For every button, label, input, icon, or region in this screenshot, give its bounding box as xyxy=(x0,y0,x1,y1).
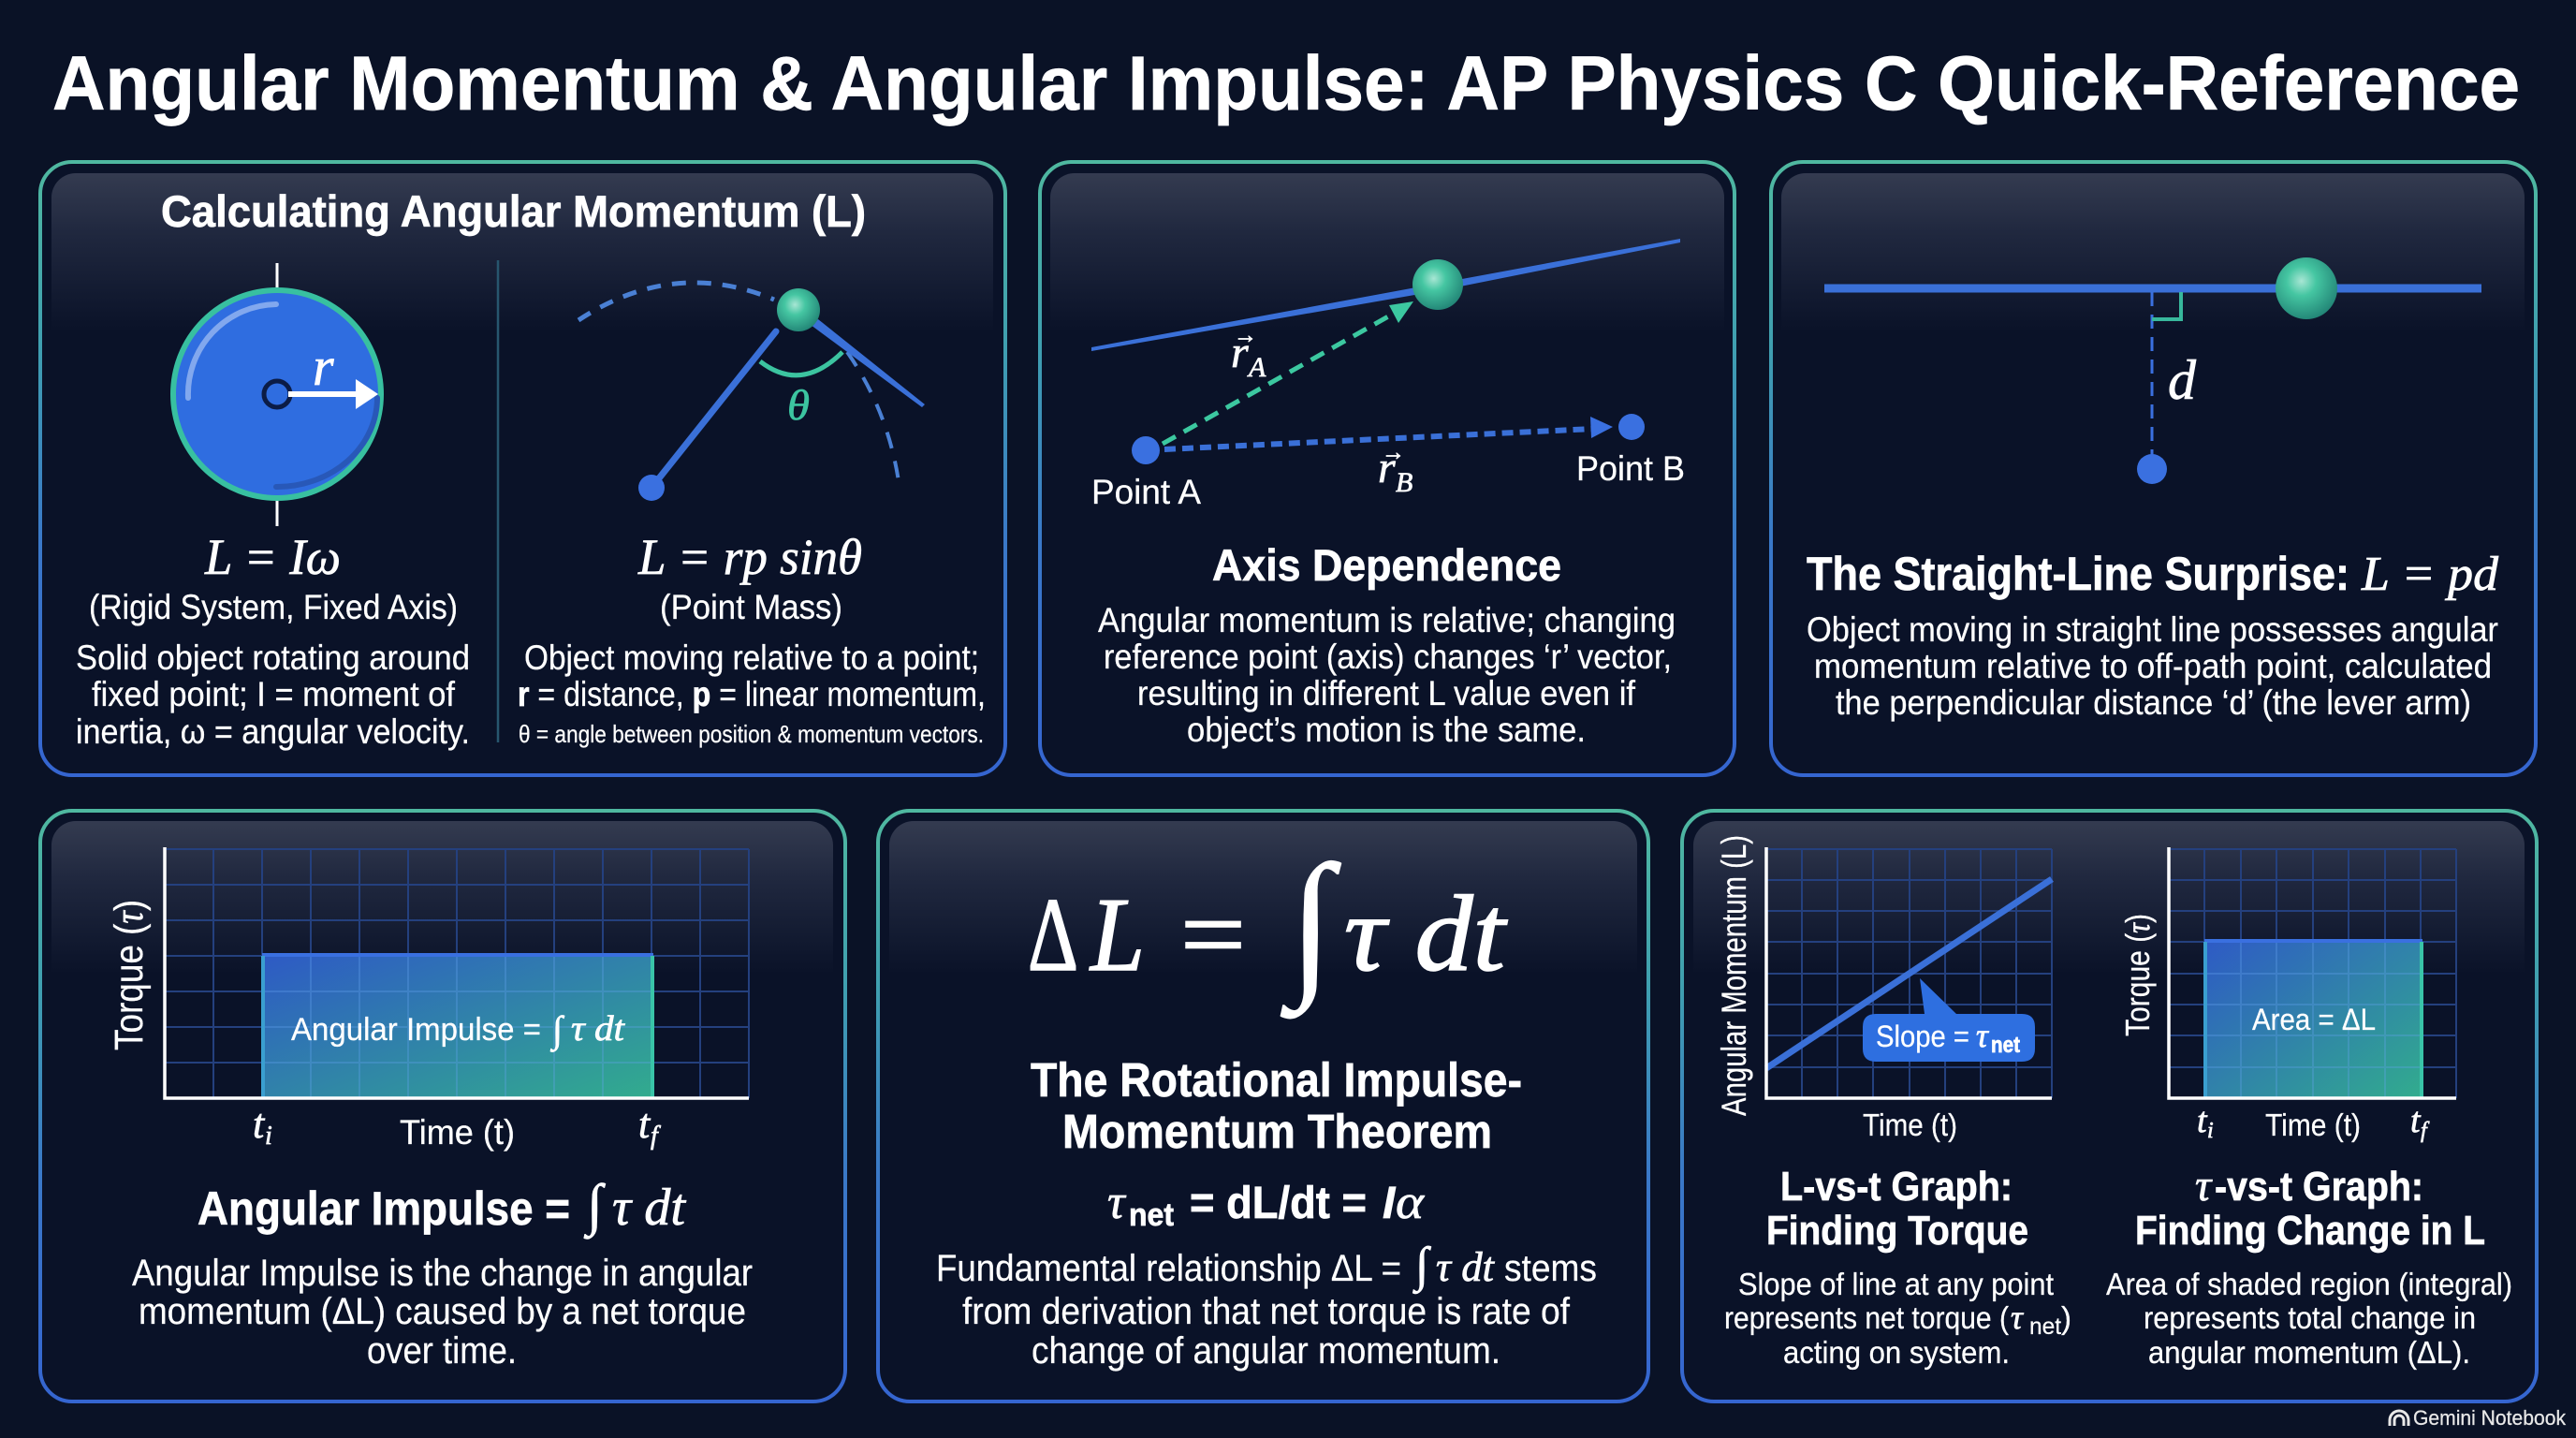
panel: axis dependence xyxy=(1040,162,1734,775)
chart: torque vs time area: Angular Impulse = xyxy=(291,1012,541,1048)
chart: L vs t: Time (t) xyxy=(1863,1108,1957,1142)
heading: straight-line surprise: The Straight-Line Surprise: xyxy=(1807,548,2349,600)
diagram: two reference points xyxy=(1091,239,1685,511)
text: theorem description xyxy=(936,1239,1597,1372)
chart: torque vs t: Area = ΔL xyxy=(2252,1003,2376,1036)
heading: rotational impulse-momentum theorem: Momentum Theorem xyxy=(1062,1105,1492,1158)
chart: L vs t: Angular Momentum (L) xyxy=(1715,835,1753,1116)
callout: slope equals net torque: net xyxy=(1991,1033,2020,1058)
label: rigid system: (Rigid System, Fixed Axis) xyxy=(89,588,458,626)
chart: torque vs t xyxy=(2118,847,2456,1143)
chart: torque vs time area: t xyxy=(638,1101,651,1147)
callout: slope equals net torque xyxy=(1863,978,2035,1062)
formula: L = I omega: L = Iω xyxy=(204,529,341,585)
text: axis dependence description: reference point (axis) changes ‘r’ vector, xyxy=(1104,638,1672,676)
text: torque-vs-t description: represents total change in xyxy=(2144,1300,2476,1335)
icon: rotating disc with radius xyxy=(173,263,381,526)
text: torque-vs-t description: angular momentum (ΔL). xyxy=(2148,1335,2470,1370)
text: axis dependence description: object’s motion is the same. xyxy=(1187,711,1586,749)
text: theorem description: Fundamental relationship ΔL = xyxy=(936,1248,1401,1289)
text: L-vs-t description: τ xyxy=(2011,1299,2024,1336)
heading: rotational impulse-momentum theorem xyxy=(1031,1053,1522,1158)
formula: delta L = integral tau dt: = xyxy=(1180,877,1246,993)
heading: L-vs-t graph xyxy=(1766,1164,2028,1254)
text: torque-vs-t description: Area of shaded region (integral) xyxy=(2106,1267,2512,1301)
chart: L vs t xyxy=(1715,835,2052,1142)
chart: torque vs t: Torque (τ) xyxy=(2118,914,2157,1036)
formula: net torque: τ xyxy=(1107,1176,1127,1229)
callout: slope equals net torque: Slope = xyxy=(1876,1020,1969,1053)
label: point mass: (Point Mass) xyxy=(660,588,842,626)
divider xyxy=(497,260,499,742)
text: angular impulse description: over time. xyxy=(367,1330,517,1372)
text: straight-line description: momentum relative to off-path point, calculated xyxy=(1814,647,2492,685)
text: point mass description: r = distance, p = linear momentum, xyxy=(518,675,986,713)
diagram: lever arm xyxy=(1824,257,2481,484)
callout: slope equals net torque: τ xyxy=(1976,1017,1989,1054)
text: L-vs-t description xyxy=(1724,1267,2071,1370)
text: angular impulse description xyxy=(132,1253,753,1372)
text: L-vs-t description: net xyxy=(2029,1313,2061,1340)
text: rigid system description xyxy=(76,638,470,751)
heading: torque-vs-t graph: Finding Change in L xyxy=(2135,1208,2485,1254)
text: angular impulse description: momentum (ΔL) caused by a net torque xyxy=(139,1291,746,1332)
title: Angular Momentum & Angular Impulse: AP Physics C Quick-Reference xyxy=(52,41,2520,126)
formula: L = r p sin theta: L = rp sinθ xyxy=(637,529,862,585)
watermark: Gemini Notebook: Gemini Notebook xyxy=(2413,1406,2567,1430)
text: axis dependence description: Angular momentum is relative; changing xyxy=(1098,601,1676,639)
text: L-vs-t description: ) xyxy=(2061,1300,2071,1335)
heading: angular impulse formula: Angular Impulse = xyxy=(198,1182,570,1235)
heading: L-vs-t graph: Finding Torque xyxy=(1766,1208,2028,1254)
diagram: two reference points: → xyxy=(1382,439,1405,465)
panel: graph analysis xyxy=(1682,811,2537,1401)
heading: torque-vs-t graph: -vs-t Graph: xyxy=(2215,1164,2423,1210)
heading: torque-vs-t graph: τ xyxy=(2195,1161,2213,1211)
text: point mass description: θ = angle between position & momentum vectors. xyxy=(519,720,984,748)
chart: torque vs t: t xyxy=(2410,1101,2422,1140)
formula: delta L = integral tau dt: τ dt xyxy=(1344,874,1508,994)
chart: torque vs t: f xyxy=(2421,1119,2430,1143)
text: theorem description: from derivation that net torque is rate of xyxy=(962,1291,1571,1332)
heading: angular impulse formula: τ dt xyxy=(612,1179,686,1237)
chart: torque vs t: i xyxy=(2207,1119,2214,1143)
heading: straight-line surprise: L = pd xyxy=(2361,548,2499,601)
diagram: two reference points: r xyxy=(1231,328,1249,377)
text: axis dependence description xyxy=(1098,601,1676,749)
formula: net torque: net xyxy=(1129,1197,1174,1233)
text: theorem description: change of angular momentum. xyxy=(1032,1330,1500,1372)
icon: rotating disc with radius: r xyxy=(313,336,334,397)
chart: torque vs time area: i xyxy=(265,1122,272,1151)
panel: rotational impulse-momentum theorem xyxy=(878,811,1648,1401)
chart: torque vs time area: τ dt xyxy=(571,1009,626,1049)
text: axis dependence description: resulting in different L value even if xyxy=(1137,674,1636,712)
chart: torque vs time area: f xyxy=(651,1122,661,1151)
heading: rotational impulse-momentum theorem: The Rotational Impulse- xyxy=(1031,1053,1522,1107)
text: straight-line description xyxy=(1807,610,2498,722)
formula: net torque: I xyxy=(1383,1179,1397,1228)
diagram: two reference points: Point A xyxy=(1091,473,1201,511)
diagram: two reference points: A xyxy=(1247,352,1266,383)
text: rigid system description: Solid object rotating around xyxy=(76,638,470,677)
panel: angular impulse xyxy=(40,811,845,1401)
formula: delta L = integral tau dt: L xyxy=(1089,877,1145,993)
diagram: two reference points: → xyxy=(1234,322,1257,348)
formula: delta L = integral tau dt: Δ xyxy=(1028,877,1078,993)
diagram: point mass with position and momentum xyxy=(578,283,925,501)
text: L-vs-t description: acting on system. xyxy=(1783,1335,2010,1370)
chart: torque vs time area: Torque (τ) xyxy=(107,900,152,1050)
formula: net torque: = dL/dt = xyxy=(1190,1179,1367,1228)
text: rigid system description: inertia, ω = angular velocity. xyxy=(76,712,470,751)
text: torque-vs-t description xyxy=(2106,1267,2512,1370)
chart: torque vs t: t xyxy=(2197,1101,2208,1140)
heading: angular impulse formula xyxy=(198,1174,686,1240)
chart: torque vs time area: Time (t) xyxy=(400,1113,515,1152)
text: angular impulse description: Angular Impulse is the change in angular xyxy=(132,1253,753,1294)
formula: delta L = integral tau dt xyxy=(1028,833,1508,1020)
heading: angular impulse formula: ∫ xyxy=(583,1174,606,1240)
text: straight-line description: Object moving in straight line possesses angular xyxy=(1807,610,2498,649)
text: point mass description xyxy=(518,638,986,748)
panel: calculating angular momentum xyxy=(40,162,1005,775)
heading: calculating angular momentum: Calculating Angular Momentum (L) xyxy=(161,186,866,236)
diagram: two reference points: B xyxy=(1396,467,1412,498)
heading: L-vs-t graph: L-vs-t Graph: xyxy=(1780,1164,2012,1210)
formula: net torque: α xyxy=(1396,1176,1426,1229)
text: theorem description: stems xyxy=(1504,1248,1597,1289)
text: L-vs-t description: represents net torque ( xyxy=(1724,1300,2009,1335)
formula: net torque xyxy=(1107,1176,1426,1233)
text: straight-line description: the perpendicular distance ‘d’ (the lever arm) xyxy=(1836,683,2471,722)
diagram: lever arm: d xyxy=(2168,349,2197,411)
heading: axis dependence: Axis Dependence xyxy=(1212,540,1561,590)
text: L-vs-t description: Slope of line at any point xyxy=(1738,1267,2054,1301)
heading: torque-vs-t graph xyxy=(2135,1161,2485,1254)
panel: straight-line surprise xyxy=(1771,162,2536,775)
diagram: two reference points: Point B xyxy=(1576,449,1685,488)
text: theorem description: ∫ xyxy=(1412,1239,1431,1294)
formula: delta L = integral tau dt: ∫ xyxy=(1281,833,1342,1020)
chart: torque vs time area: t xyxy=(253,1101,266,1147)
text: rigid system description: fixed point; I = moment of xyxy=(92,675,456,713)
chart: torque vs time area xyxy=(107,847,749,1152)
diagram: point mass with position and momentum: θ xyxy=(787,381,810,429)
text: point mass description: Object moving relative to a point; xyxy=(524,638,979,677)
chart: torque vs time area: ∫ xyxy=(549,1008,565,1052)
chart: torque vs t: Time (t) xyxy=(2265,1108,2361,1142)
diagram: two reference points: r xyxy=(1378,443,1396,492)
text: theorem description: τ dt xyxy=(1436,1244,1496,1290)
